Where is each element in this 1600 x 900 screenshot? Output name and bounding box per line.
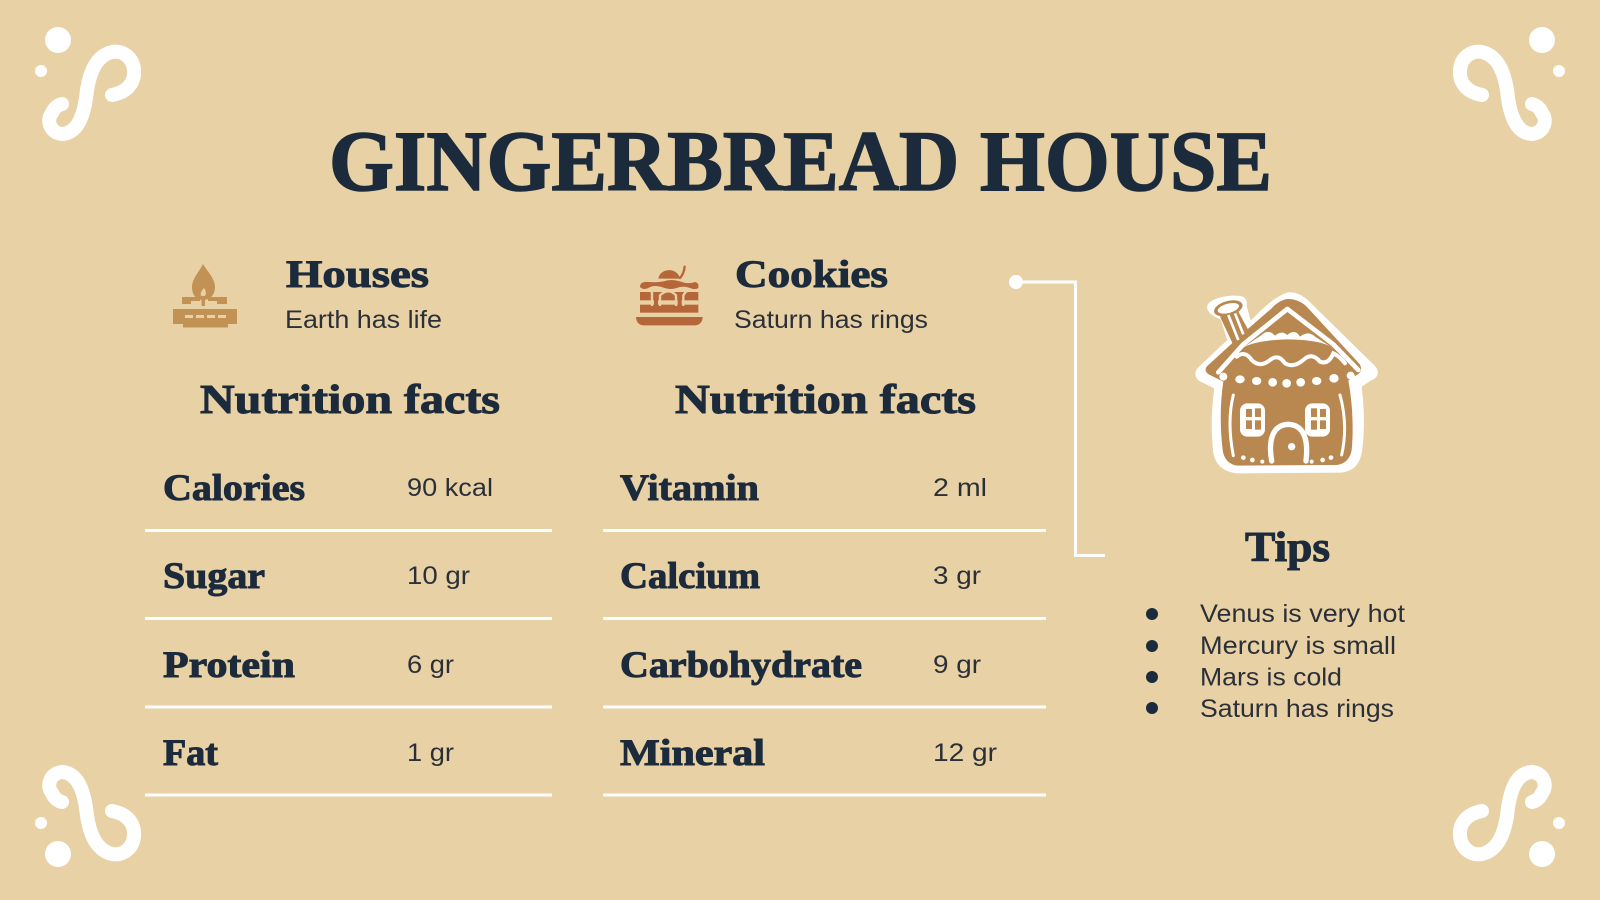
label: Fat [163,733,219,774]
label: Carbohydrate [620,645,862,686]
table row: Fat [163,733,454,774]
text: Saturn has rings: Saturn has rings [734,306,928,334]
value: 6 gr [407,651,454,679]
table row: Carbohydrate [620,645,981,686]
label: Mineral [620,733,765,774]
ornament: bottom-right swirl [1460,772,1565,867]
label: Protein [163,645,295,686]
icon: layered cake [636,267,703,325]
icon: candle on bricks [173,264,237,328]
label: Sugar [163,556,265,597]
table row: Sugar [163,556,470,597]
heading: Cookies: Cookies [735,253,888,296]
value: 90 kcal [407,474,493,502]
bullet: Saturn: Saturn has rings [1200,695,1394,723]
label: Calcium [620,556,760,597]
label: Vitamin [620,468,759,509]
ornament: top-right swirl [1460,27,1565,134]
heading: Nutrition facts: Nutrition facts [675,376,976,422]
table row: Calcium [620,556,981,597]
bullet: Mercury: Mercury is small [1200,632,1396,660]
value: 2 ml [933,474,987,502]
value: 9 gr [933,651,981,679]
bullet: Mars: Mars is cold [1200,664,1342,692]
table row: Mineral [620,733,997,774]
table row: Calories [163,468,493,509]
text: Earth has life: Earth has life [285,306,442,334]
title: GINGERBREAD HOUSE [329,113,1272,209]
value: 12 gr [933,739,997,767]
bullet: Venus: Venus is very hot [1200,600,1405,628]
ornament: bottom-left swirl [35,772,134,867]
panel: cookies column [603,253,1046,795]
value: 3 gr [933,562,981,590]
panel: tips [1146,525,1405,723]
panel: houses column [145,253,552,795]
heading: Houses: Houses [286,253,429,296]
value: 10 gr [407,562,470,590]
connector arrow: cookies to tips [1009,275,1105,556]
heading: Tips: Tips [1245,525,1330,571]
label: Calories [163,468,305,509]
bullet: Mars [1146,664,1342,692]
icon: gingerbread house [1195,292,1378,473]
table row: Protein [163,645,454,686]
heading: Nutrition facts: Nutrition facts [200,376,500,422]
value: 1 gr [407,739,454,767]
bullet list [1146,600,1405,723]
table row: Vitamin [620,468,987,509]
ornament: top-left swirl [35,27,134,134]
